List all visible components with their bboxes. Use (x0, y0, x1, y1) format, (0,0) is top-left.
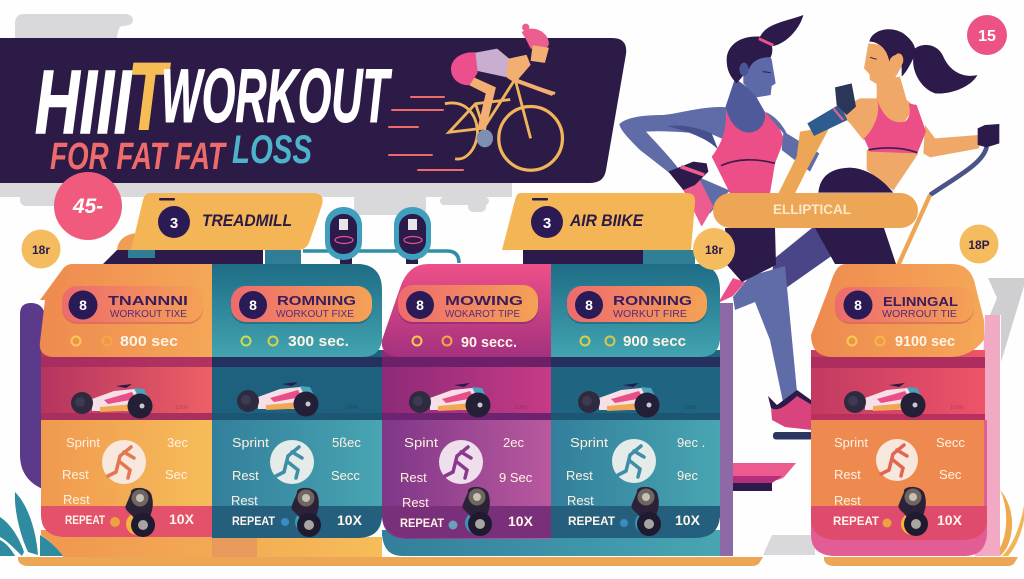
duration row (848, 333, 955, 350)
panel: rowing card: 1000 (345, 405, 359, 411)
icon: bike machine (409, 383, 490, 418)
base strips (18, 557, 1018, 566)
repeat row (833, 487, 963, 536)
interval text (62, 435, 188, 507)
repeat row: REPEAT (400, 516, 445, 530)
interval text: Rest (63, 492, 90, 507)
tab label: TREADMILL (202, 211, 292, 230)
icon: treadmill badge: 3 (170, 215, 178, 232)
pill header: WORKOUT TIXE (110, 308, 187, 320)
panel: running card (551, 264, 720, 538)
panel: air bike tab (502, 193, 695, 250)
interval text (400, 435, 533, 510)
interval text: Rest (400, 470, 427, 485)
interval text: Rest (834, 467, 861, 482)
illustration: legs (718, 228, 896, 491)
duration row: 90 secc. (461, 334, 517, 351)
runner icon (439, 440, 483, 484)
interval text: 9 Sec (499, 470, 533, 485)
pill header: 8 (416, 297, 424, 313)
panel: mowing card: 1000 (514, 405, 528, 411)
repeat row: 10X (937, 512, 963, 528)
runner icon (612, 439, 656, 483)
illustration: left runner (619, 15, 819, 227)
runner icon (102, 440, 146, 484)
panel: treadmill tab (117, 193, 323, 250)
interval text: 9ec (677, 468, 698, 483)
icon: sensor right (394, 207, 431, 264)
interval text: Sec (165, 467, 188, 482)
repeat row (232, 488, 363, 537)
panel: elliptical tab (713, 193, 918, 228)
repeat row: 10X (169, 511, 195, 527)
repeat row: 10X (675, 512, 701, 528)
badge: 18 right (960, 224, 998, 264)
pill header (398, 285, 538, 324)
repeat row: REPEAT (568, 514, 616, 528)
interval text: Rest (232, 468, 259, 483)
duration row (242, 333, 349, 350)
pill header: WOKAROT TIPE (445, 308, 520, 320)
repeat row: REPEAT (65, 513, 106, 527)
badge: 18 right: 18P (968, 238, 990, 252)
pill header: ELINNGAL (883, 294, 958, 309)
interval text: 2ec (503, 435, 524, 450)
interval text: 3ec (167, 435, 188, 450)
panel: elliptical card: 1000 (950, 405, 964, 411)
repeat row (568, 487, 701, 536)
panel: mowing card (382, 264, 551, 539)
panel: elliptical card (811, 264, 987, 556)
pill header (231, 286, 372, 324)
badge: 15 (967, 15, 1007, 55)
interval text: Rest (402, 495, 429, 510)
interval text: Rest (567, 493, 594, 508)
title: HIIIT WORKOUT (35, 43, 392, 153)
interval text: Rest (566, 468, 593, 483)
panel: treadmill card: 1000 (175, 405, 189, 411)
interval text: Rest (231, 493, 258, 508)
runner icon (876, 439, 918, 481)
icon: bike machine (71, 384, 152, 418)
repeat row: REPEAT (833, 514, 880, 528)
pill header: WORKOUT FIXE (276, 308, 354, 320)
interval text: Spint (404, 435, 438, 450)
icon: treadmill badge (158, 198, 190, 238)
icon: sensor left (325, 207, 362, 264)
icon: cyclist (445, 24, 562, 170)
duration row: 900 secc (623, 333, 686, 350)
pill header: ROMNING (277, 293, 356, 308)
pill header: 8 (249, 297, 257, 313)
pill header: TNANNNI (108, 293, 188, 308)
interval text: Sprint (66, 435, 100, 450)
title: HIIIT WORKOUT: HIII (35, 53, 132, 153)
repeat row: REPEAT (232, 514, 276, 528)
interval text: 5ßec (332, 435, 361, 450)
panel: elliptical tab: ELLIPTICAL (773, 202, 851, 217)
runner icon (270, 440, 314, 484)
badge: 45 (54, 172, 122, 240)
title: HIIIT WORKOUT: T (128, 43, 171, 150)
interval text (231, 435, 361, 508)
icon: bike machine (844, 383, 926, 418)
speed lines (389, 97, 463, 170)
duration row: 9100 sec (895, 333, 955, 350)
pill header: WORROUT TIE (882, 308, 957, 320)
badge: 45: 45- (72, 195, 103, 218)
repeat row (400, 487, 534, 536)
icon: bike machine (237, 382, 318, 416)
pill header (62, 286, 203, 324)
decorative plants and side panels (0, 303, 1024, 556)
panel: running card: 1000 (683, 405, 697, 411)
subtitle: for fat fat loss: FOR FAT FAT (50, 136, 227, 178)
connectors under treadmill and air bike tabs (103, 250, 695, 264)
interval text (566, 435, 705, 508)
interval text: Sprint (834, 435, 868, 450)
pill header (835, 287, 974, 324)
interval text: Sprint (570, 435, 608, 450)
interval text: Rest (62, 467, 89, 482)
duration row (580, 333, 686, 350)
pill header: 8 (585, 297, 593, 313)
interval text: Sprint (232, 435, 269, 450)
tab label: AIR BIIKE (569, 211, 644, 230)
icon: air bike badge: 3 (543, 215, 551, 232)
repeat row (65, 488, 195, 537)
duration row: 300 sec. (288, 333, 349, 350)
badge: 18 center (693, 228, 735, 270)
pill header: MOWING (445, 293, 523, 308)
repeat row: 10X (508, 513, 534, 529)
bottom fills behind cards (41, 530, 720, 557)
icon: air bike badge (531, 198, 563, 238)
subtitle: for fat fat loss: LOSS (232, 128, 312, 172)
panel: treadmill card (40, 264, 212, 537)
interval text: Secc (936, 435, 965, 450)
interval text: Sec (939, 467, 962, 482)
repeat row: 10X (337, 512, 363, 528)
duration row (72, 333, 178, 350)
interval text: 9ec . (677, 435, 705, 450)
interval text: Rest (834, 493, 861, 508)
pill header: RONNING (613, 293, 692, 308)
badge: 18 left (22, 230, 60, 268)
pill header: 8 (854, 297, 862, 313)
badge: 18 left: 18r (32, 243, 50, 257)
badge: 18 center: 18r (705, 243, 723, 257)
title: HIIIT WORKOUT: WORKOUT (161, 54, 392, 139)
pill header (567, 286, 707, 324)
icon: bike machine (578, 383, 660, 418)
pill header: 8 (79, 297, 87, 313)
illustration: right runner (778, 29, 999, 265)
panel: rowing card (212, 264, 382, 538)
duration row (412, 334, 517, 351)
title banner (0, 24, 626, 183)
badge: 15: 15 (978, 28, 996, 45)
duration row: 800 sec (120, 333, 178, 350)
interval text: Secc (331, 468, 360, 483)
pill header: WORKUT FIRE (613, 308, 687, 320)
interval text (834, 435, 965, 508)
